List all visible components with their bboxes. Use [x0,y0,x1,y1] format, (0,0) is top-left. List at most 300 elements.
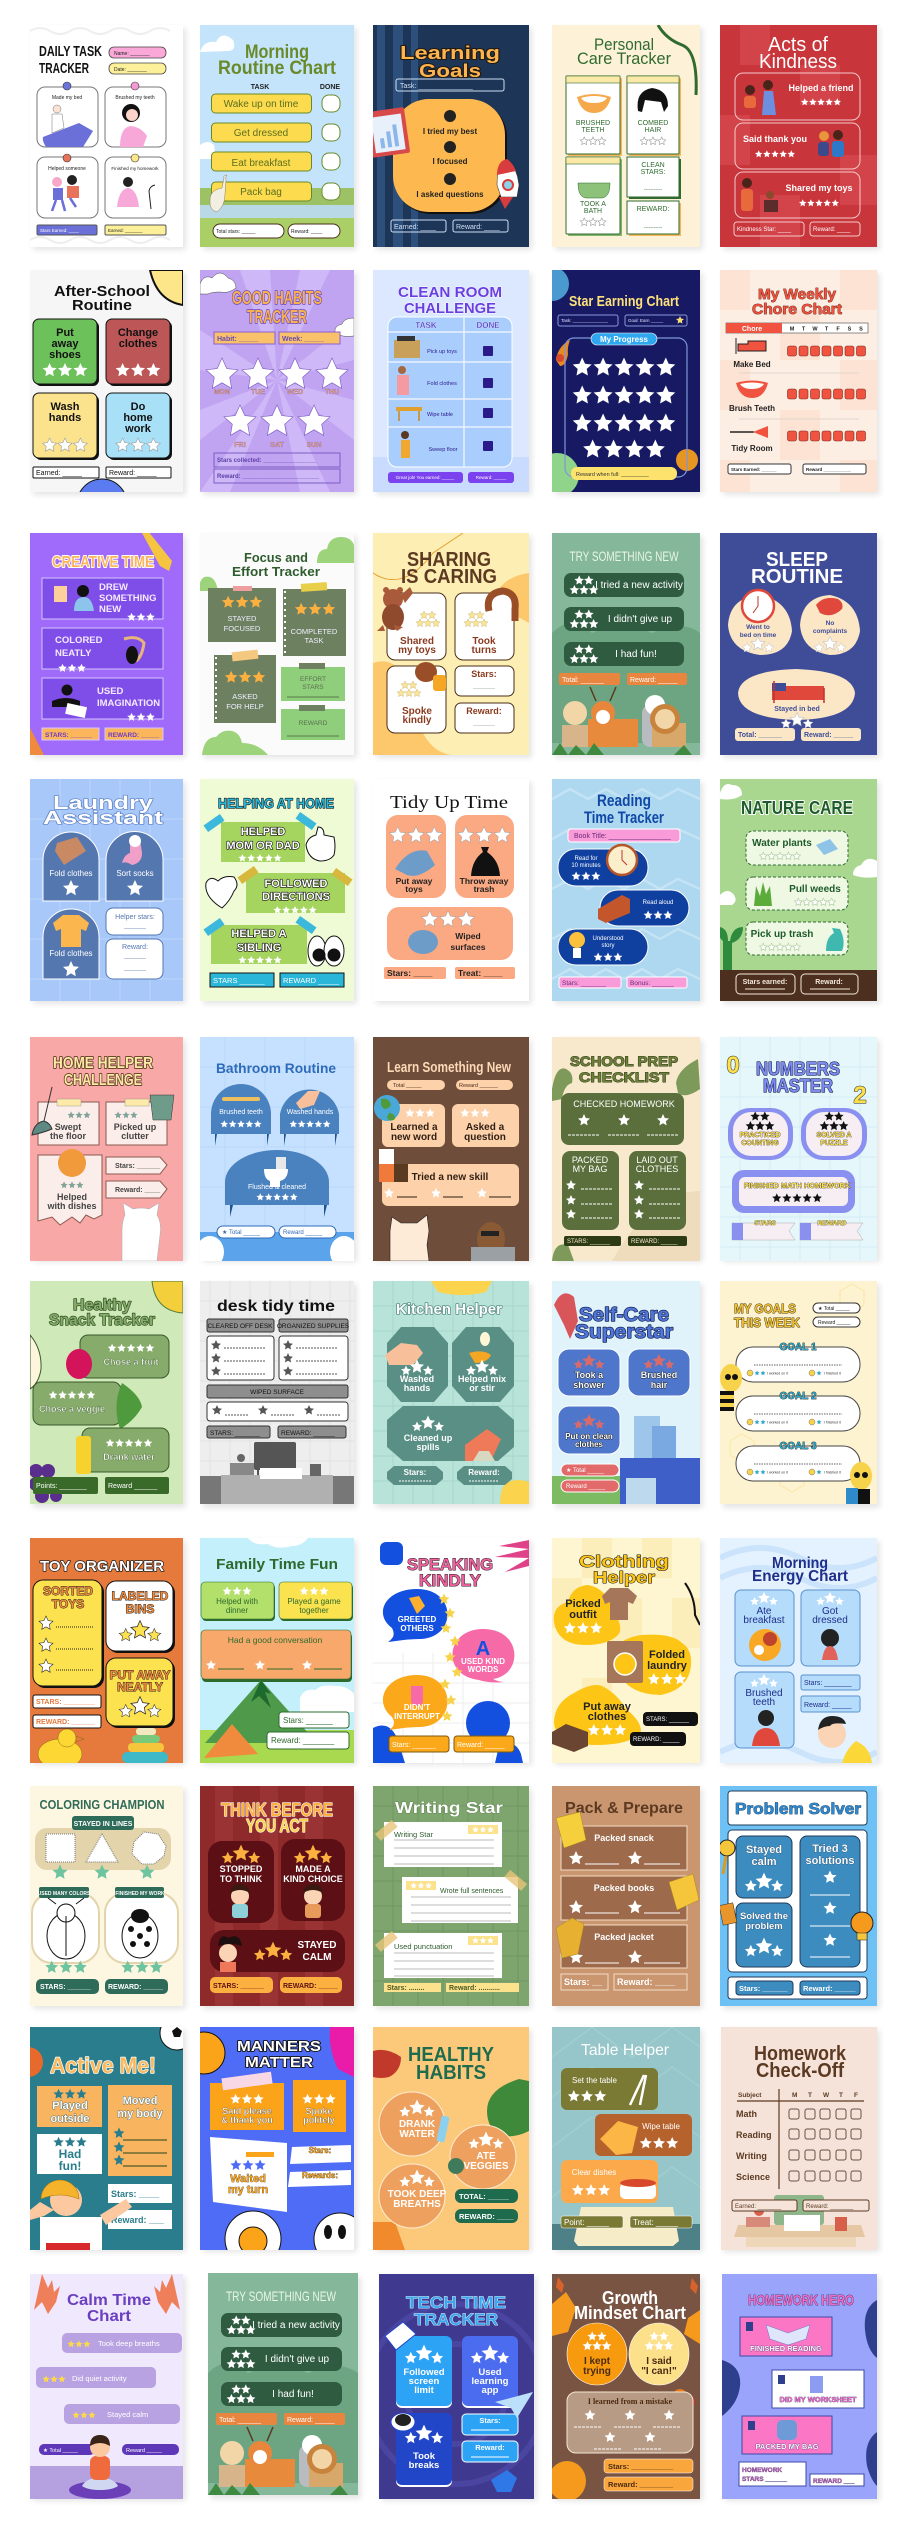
card: Coloring Champion [30,1786,183,2006]
card: After-School Routine [30,270,183,492]
card: Pack and Prepare [552,1786,700,2006]
panel: drank water: Drank water [103,1452,155,1462]
note: effort stars: STARS [302,684,324,691]
day labels: Mon to Thu: TUE [251,389,265,396]
icon: blue circle [77,479,127,529]
panel: wiped surfaces: surfaces [451,942,486,952]
title: TRACKER [247,307,307,327]
card: Desk Tidy Time [200,1281,354,1504]
note: completed task: COMPLETED [291,627,338,636]
day labels: Fri to Sun [234,442,321,449]
card: Reading Time Tracker [552,779,700,1001]
card: Good Habits Tracker [200,270,354,492]
panel: flushed and cleaned: Flushed & cleaned [248,1184,306,1191]
panel: clean stars: ----------- [644,187,662,193]
header row: T [802,326,806,332]
panel: throw away trash: Throw away [460,876,509,886]
footer fields [561,1464,619,1492]
card: Clothing Helper [552,1538,700,1763]
circle: ate veggies: VEGGIES [463,2161,509,2172]
icon: rocket [497,159,519,209]
icon: turn arrow [488,591,515,621]
panel: said please and thank you: Said please [222,2106,272,2116]
title: Energy Chart [752,1568,849,1585]
numbers [726,1052,867,1109]
icon: kid with helmet [30,2180,132,2250]
card: Helping at Home [200,779,354,1001]
goal 2: I worked on it [767,1420,788,1424]
panel: finished my homework: Finished my homework [111,166,159,171]
panel: read aloud [598,890,689,926]
panel: laid out clothes: CLOTHES [636,1164,678,1174]
title [570,1053,678,1085]
title: Kindness [759,51,837,73]
panel: put away shoes [33,319,99,386]
card: Writing Star [373,1786,529,2006]
panel: took a shower [558,1349,620,1396]
icon: crescent [150,270,183,305]
circle: I said I can: I said [646,2356,672,2367]
table: subjects and days: T [839,2092,843,2099]
panel: played outside [37,2086,102,2127]
panel: spoke kindly: kindly [403,715,432,726]
title: Mindset Chart [574,2303,686,2323]
fields: stars and rewards [288,2145,351,2187]
footer fields [210,973,344,987]
bubble: greeted others: GREETED [398,1615,437,1624]
task and goal fields [558,315,687,326]
panel: picked up clutter: clutter [121,1131,149,1141]
illustration: city [552,1416,700,1504]
card: Healthy Habits [373,2027,529,2250]
footer fields [33,467,171,478]
footer fields: Reward: ____ [456,224,500,231]
task and goal fields: Task: ______________ [561,318,608,323]
panel: got dressed: dressed [812,1615,848,1626]
note: reward [281,705,345,740]
goal 2: I finished it [824,1420,841,1424]
icon: rubber duck [38,1729,84,1769]
header row: W [812,326,818,332]
top fields: Reward _____ [818,1320,851,1326]
panel: did my worksheet [772,2370,864,2408]
panel: helped mix or stir: Helped mix [458,1374,506,1384]
icon: goose [210,175,227,212]
ribbons: stars and reward [732,1220,863,1240]
panel: brushed teeth [211,1084,271,1146]
panel: clean stars: STARS: [641,169,665,176]
window: combed hair: COMBED [638,120,668,127]
footer fields: Total: ______ [562,677,604,684]
footer buttons [388,472,514,483]
header row: S [859,326,863,332]
panel: helped a sibling [204,916,316,964]
title: Calm Time [67,2292,151,2309]
panel: tried 3 solutions: Tried 3 [812,1843,848,1855]
card: Toy Organizer [30,1538,183,1763]
panel: helped mom or dad: MOM OR DAD [226,840,300,852]
icon: cat [390,1215,429,1261]
fields: stars and reward: Reward: ___ [111,2215,165,2225]
table: subjects and days: Science [736,2172,770,2182]
card: Acts of Kindness [720,25,877,247]
panel: followed screen limit: limit [414,2385,435,2396]
title: Laundry [53,793,153,813]
title: Active Me! [50,2053,156,2078]
panel: helped a sibling: SIBLING [237,942,281,954]
row: didn't give up: I didn't give up [265,2354,330,2365]
footer fields: Stars: ______ [392,1742,436,1749]
panel: used imagination: IMAGINATION [97,698,160,709]
footer fields: ★ Total _____ [566,1467,605,1474]
title: Homework [754,2043,847,2065]
icon: meditating child [69,2435,131,2499]
panel: reward: ----------- [124,968,146,974]
panel: wiped surfaces [387,907,513,960]
table: subjects and days: W [823,2092,830,2099]
footer fields: Treat: ____ [458,968,503,978]
footer fields: Reward: ________ [608,2480,674,2489]
blob: picked outfit [554,1585,637,1645]
panel: shared my toys [735,172,860,218]
title: Learning [400,43,500,63]
panel: washed hands: hands [404,1383,430,1393]
title: Self-Care [579,1305,669,1326]
note: waited my turn [210,2137,287,2212]
title: Chore Chart [752,301,842,318]
panel: solved the problem [736,1903,792,1967]
footer fields [561,2216,692,2228]
title: SLEEP [766,549,828,571]
card: Bathroom Routine [200,1037,354,1261]
panel: ate breakfast: breakfast [743,1615,785,1626]
note: stayed focused: STAYED [228,614,257,623]
title: Acts of [768,34,828,56]
blob: put away clothes [552,1685,641,1752]
header row: F [836,326,840,332]
footer fields: STARS: _______ [210,1430,260,1437]
card: Table Helper [552,2027,700,2250]
panel: brushed my teeth: Brushed my teeth [115,95,155,101]
panel: solved the problem: Solved the [740,1911,788,1922]
card: Problem Solver [720,1786,877,2006]
panel: drew something new [42,578,163,621]
panel: chose a fruit [66,1335,169,1379]
panel: reward: ----------- [124,956,146,962]
task: eat breakfast: Eat breakfast [232,158,291,169]
panel: learned a new word: new word [391,1132,437,1143]
title: NATURE CARE [741,798,853,818]
title [752,1555,849,1585]
panel: took a shower: shower [573,1380,605,1390]
icon: googly eyes [308,936,344,966]
icon: stacking rings [122,1728,168,1763]
footer fields: REWARD _____ [283,976,340,985]
card: Sleep Routine [720,533,877,755]
title: TECH TIME [406,2293,506,2312]
panel: finished my homework [105,154,166,218]
card: Learning Goals [373,25,529,247]
icon: sprout [719,927,743,971]
footer fields [33,1695,101,1728]
panel: took turns [455,593,514,660]
panel: solved the problem: problem [745,1921,783,1932]
panel: reward: Reward: [475,2443,505,2452]
goal 3: I finished it [824,1470,841,1474]
panel: used imagination: USED [97,686,124,697]
card: Try Something New (repeat) [208,2273,358,2495]
icon: book [669,1874,699,1910]
bubble: used kind words: WORDS [468,1665,499,1674]
panel: reward [801,1696,860,1712]
blob: picked outfit: Picked [565,1598,601,1610]
footer fields: REWARD: _____ [108,1984,163,1991]
panel: used learning app: learning [472,2376,509,2387]
card: Growth Mindset Chart [548,2274,700,2501]
ribbons: stars and reward: STARS [754,1220,776,1227]
title: My Weekly [758,286,837,303]
panel: no complaints: No [826,620,834,627]
card: Sharing Is Caring [373,533,529,755]
panel: made a kind choice [281,1839,345,1921]
row: tried a new activity: I tried a new activity [252,2320,340,2331]
panel: wipe table: Wipe table [642,2122,680,2131]
panel: put away toys [386,815,446,898]
note: completed task [283,582,346,656]
title: HABITS [416,2062,486,2084]
title [237,2038,321,2071]
footer fields: Earned: _______ [108,228,143,233]
note: completed task: TASK [304,636,324,645]
panel: brushed teeth: teeth [753,1697,775,1708]
panel: reward: ----------- [644,225,662,231]
panel: helped with dinner: Helped with [216,1597,258,1606]
flower: solved a puzzle [801,1108,867,1160]
bubble: didn't interrupt [383,1675,456,1730]
icons: meat, spinach, carrot [373,2050,529,2250]
panel: wiped surfaces: Wiped [455,931,481,941]
card: School Prep Checklist [552,1037,700,1261]
panel: played outside: outside [50,2113,90,2125]
panel: went to bed on time: Went to [746,624,770,631]
footer fields: Reward: ........... [449,1985,500,1992]
decoration: dots and rays [373,1540,529,1763]
panel: followed screen limit: Followed [403,2367,445,2378]
panel: understood story: story [601,943,615,949]
panel: my progress [565,333,687,477]
panel: pull weeds: Pull weeds [789,884,841,895]
title box [728,1791,867,1825]
top fields [387,1080,513,1090]
panel: stayed calm: Stayed [746,1844,782,1856]
card: Speaking Kindly [373,1540,529,1763]
panel: fold clothes (shirt): Fold clothes [49,949,93,958]
task field: Task: ______________ [400,83,473,90]
footer fields: Reward: _____ [630,677,678,684]
footer fields: Kindness Star: ____ [737,227,792,233]
icon: dinosaurs [552,1059,700,1261]
note: wrote full sentences [402,1870,527,1923]
panel: packed snack [561,1826,687,1870]
habit and week fields [214,332,340,344]
footer fields [736,974,858,994]
title: YOU ACT [246,1816,308,1836]
footer fields: REWARD: ____ [459,2212,514,2221]
title: MATTER [245,2054,313,2071]
panel: brushed teeth [735,1672,794,1748]
panel: spoke politely: Spoke [305,2106,333,2116]
panel: reward [627,201,681,236]
card: Try Something New [552,533,700,755]
icons: basketball and soccer ball [13,2016,194,2077]
illustration: desk and chair [734,2195,865,2247]
panel: followed screen limit [396,2336,452,2408]
panel: tried a new skill: Tried a new skill [412,1172,489,1183]
blob: put away clothes: Put away [583,1701,632,1713]
circle: took deep breaths: BREATHS [393,2199,441,2210]
title [574,2288,686,2323]
title: Helper [593,1568,655,1587]
panel: put away shoes: away [52,338,79,350]
title: Check-Off [756,2060,844,2082]
panel: washed hands [385,1327,448,1402]
panel: sort socks: Sort socks [116,869,154,878]
table: subjects and days: M [792,2092,797,2099]
card: Home Helper Challenge [30,1037,183,1261]
note: asked for help: ASKED [232,692,258,701]
window: brushed teeth: TEETH [582,127,604,134]
panel: put away shoes: shoes [49,349,81,361]
table: tasks: DONE [476,321,500,330]
panel: flushed and cleaned [225,1150,329,1217]
footer fields: Earned: _____ [36,470,82,477]
row: had fun [221,2382,342,2406]
row: tidy room [730,426,866,453]
footer fields: Stars Earned: ______ [731,467,777,472]
card: Laundry Assistant [30,779,183,1001]
footer fields: REWARD: _____ [283,1983,338,1990]
column headers: ORGANIZED SUPPLIES [277,1323,350,1330]
title [407,1555,493,1590]
card: Numbers Master [720,1037,877,1261]
card: Tidy Up Time [374,780,529,1001]
panel: stayed calm: calm [751,1856,777,1868]
panel: learned a new word: Learned a [390,1122,438,1133]
row: brush teeth [729,380,866,413]
title: Table Helper [581,2042,670,2059]
footer fields [561,1974,687,1990]
footer fields [39,2444,179,2455]
footer fields: STARS: ______ [646,1717,690,1723]
panel: played a game together: together [299,1606,329,1615]
panel: water plants [746,831,848,865]
panel: got dressed [801,1590,860,1666]
title: THIS WEEK [734,1315,801,1330]
panel: sort socks [106,832,163,901]
panel: swept the floor [38,1099,99,1145]
panel: moved my body [108,2085,172,2176]
panel: read for 10 minutes [558,845,648,886]
panel: finished reading: FINISHED READING [750,2344,822,2353]
numbers: 0 [726,1052,740,1079]
panel: stopped to think [208,1841,274,1923]
footer fields [734,222,860,236]
title [734,1301,801,1330]
panel: reward [455,703,514,733]
panel: stars [455,666,514,696]
panel: packed books [561,1876,687,1920]
footer fields: Points: _______ [36,1483,87,1490]
card: My Weekly Chore Chart [720,270,877,492]
footer fields: Reward: _____ [803,1984,856,1993]
icon: grapes [29,1464,66,1503]
book title field: Book Title: ________________ [574,833,671,840]
panel: washed hands: Washed [400,1374,434,1384]
panel: stayed calm: CALM [303,1952,331,1963]
stars collected and reward: Stars collected: ________________ [217,458,317,464]
goal 3 [736,1441,860,1481]
panel: put on clean clothes: clothes [575,1440,604,1449]
title: NUMBERS [756,1059,840,1079]
note: effort stars [281,663,345,701]
floor [30,2466,183,2499]
title: CREATIVE TIME [52,554,154,571]
note: effort stars: EFFORT [300,676,326,683]
banner: finished math homework: FINISHED MATH HOMEWORK [744,1181,851,1190]
panel: took turns: turns [472,645,497,656]
panel: change clothes: clothes [119,338,157,350]
panel: stars: Stars: _______ [804,1680,852,1687]
panel: do homework: work [124,423,152,435]
card: Family Time Fun [200,1538,354,1763]
footer fields: Treat: _____ [633,2218,679,2227]
panel: stayed calm [210,1930,345,1972]
day labels: Mon to Thu [214,389,339,396]
panel: checked homework: CHECKED HOMEWORK [573,1099,675,1109]
panel: used many colors [32,1887,99,1973]
panel: read aloud: Read aloud [643,900,673,906]
footer fields [216,2413,345,2425]
footer fields [33,1477,169,1494]
panel: helped mix or stir [452,1327,514,1402]
card: Homework Check-Off [721,2027,877,2250]
row: had fun [564,642,684,666]
icon: chips [556,1812,586,1848]
note: asked for help: FOR HELP [226,702,264,711]
title [401,549,497,588]
footer fields [389,1736,514,1752]
panel: drew something new: SOMETHING [99,593,157,604]
fields: homework stars and reward: REWARD ___ [813,2478,855,2485]
title: Morning [772,1555,828,1572]
card: Creative Time [30,533,183,755]
bubble: greeted others [383,1589,456,1642]
footer fields [42,728,163,740]
footer fields: STARS: ______ [213,1983,264,1990]
task field [396,79,504,91]
panel: do homework: Do [131,401,146,413]
panel: spoke kindly: Spoke [402,706,432,717]
panel: clean stars: CLEAN [641,162,665,169]
panel: wash hands: hands [49,412,81,424]
title: Bathroom Routine [216,1060,336,1076]
fields: stars and reward [108,2184,172,2229]
panel: set the table: Set the table [572,2076,617,2085]
title: Growth [602,2288,658,2308]
title: Routine Chart [218,58,337,79]
note: reward: REWARD [299,720,328,727]
card: Learn Something New [373,1037,529,1261]
